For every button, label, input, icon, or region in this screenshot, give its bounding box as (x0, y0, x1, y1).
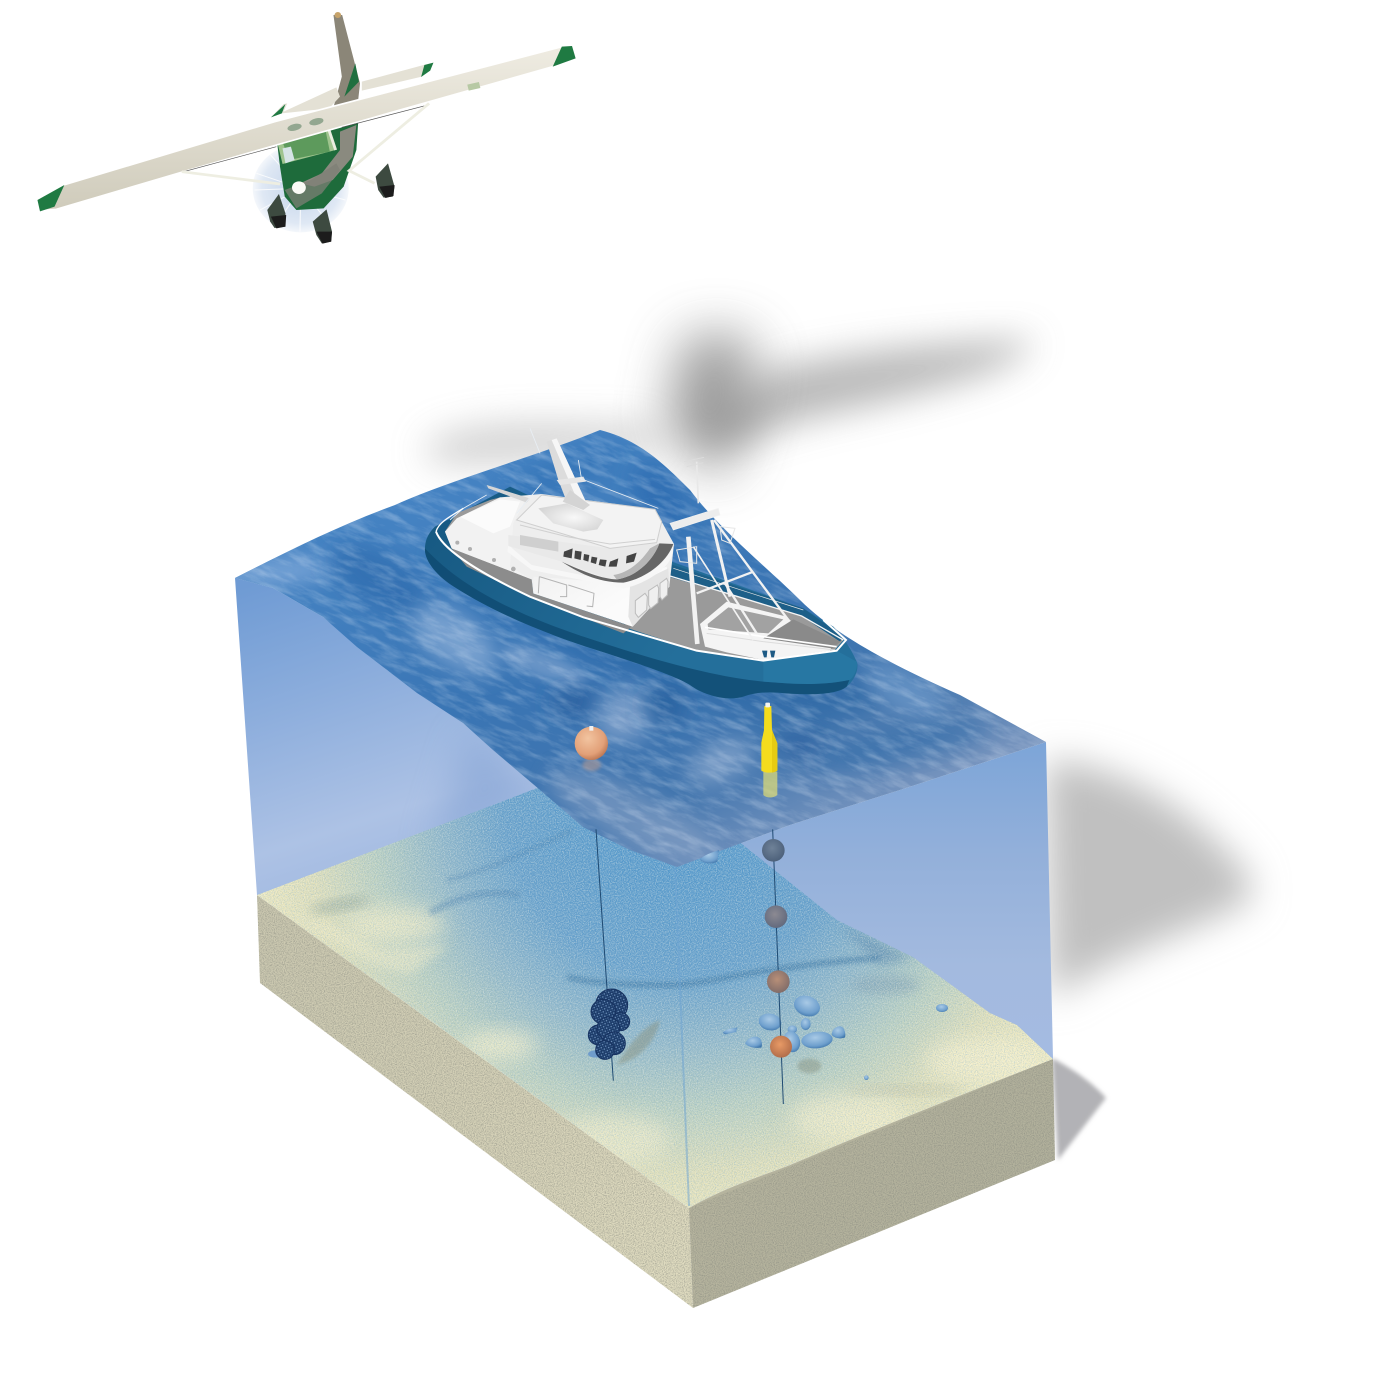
stone left face (257, 895, 693, 1308)
sensor string with spheres (762, 829, 792, 1104)
funnel mast (547, 438, 587, 503)
stone right face (689, 1059, 1055, 1308)
wheelhouse windows (563, 548, 637, 567)
centre wheel (313, 209, 332, 243)
side deck (442, 537, 632, 633)
wheelhouse (508, 535, 658, 579)
deck rail (436, 532, 846, 661)
sand dunes (290, 830, 1045, 1166)
bow rail details (762, 651, 775, 657)
portholes (455, 541, 516, 571)
propeller disc (253, 144, 349, 232)
tail boom (333, 15, 360, 110)
bow highlight (763, 651, 857, 684)
aft well box (700, 602, 841, 660)
hull (425, 487, 857, 698)
cast shadow: right of block (1046, 760, 1252, 1000)
left water face (235, 578, 640, 905)
net balls (588, 989, 630, 1059)
trawl gantry (670, 457, 788, 644)
windscreen (276, 125, 336, 164)
sphere one (762, 839, 785, 862)
sphere four (770, 1036, 792, 1058)
stone base of block (250, 880, 1065, 1315)
upper deck roof (517, 495, 662, 548)
surface float: orange sphere (575, 726, 608, 771)
stern cabin wall (445, 497, 532, 579)
side cabin doors (538, 577, 594, 607)
sphere three (767, 970, 790, 993)
second level ledge (507, 544, 674, 588)
seabed sand (258, 788, 1053, 1208)
survey aircraft (37, 12, 576, 244)
lower block (533, 567, 669, 627)
superstructure base (445, 494, 674, 627)
boom arm (487, 485, 530, 503)
fuselage (276, 122, 358, 210)
sphere two (765, 905, 787, 928)
tailplane (271, 87, 340, 117)
wave shading (235, 434, 1046, 1074)
hull lower shadow (425, 548, 849, 698)
wing struts (182, 103, 429, 184)
back water wall and front water faces (235, 578, 1053, 1060)
surface marker: yellow buoy (761, 703, 777, 797)
wing (37, 47, 575, 211)
cast shadow: base of block (1052, 1058, 1106, 1160)
mooring line with net cluster (588, 829, 660, 1081)
far bulwark (668, 563, 843, 642)
right water face (677, 742, 1053, 1060)
smoke plume (425, 333, 1035, 480)
right wheel (376, 163, 395, 198)
top rails (450, 428, 658, 520)
nose cowling (285, 163, 340, 208)
water edge highlight at front corner (675, 866, 689, 1206)
fishing research vessel (425, 428, 857, 698)
seabed rocks (700, 850, 869, 1080)
water surface (235, 430, 1046, 867)
small rock right (936, 1004, 948, 1012)
front cabin door panels (635, 578, 668, 617)
left wheel (267, 194, 285, 228)
main deck (623, 577, 843, 661)
